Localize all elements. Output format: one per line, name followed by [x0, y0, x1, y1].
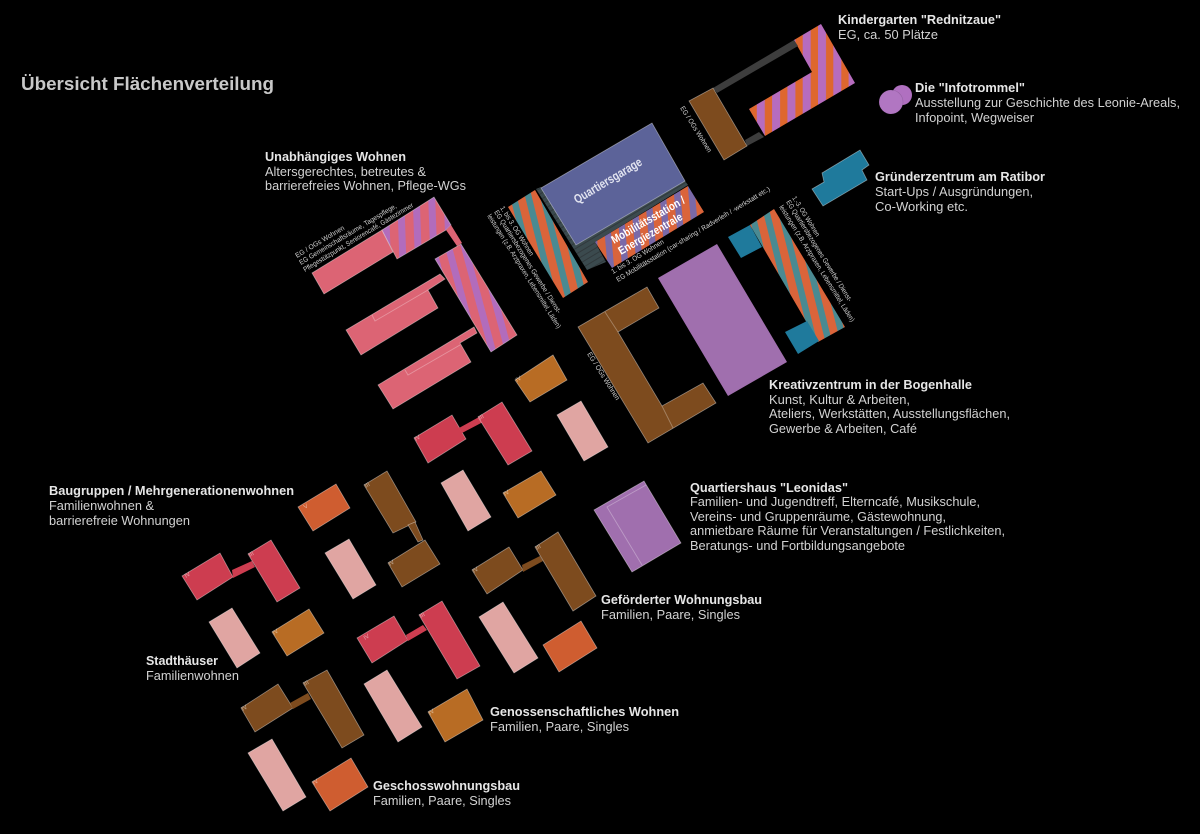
- panel: Unabhängiges Wohnen buildings: [294, 197, 517, 409]
- text: Gründerzentrum: [875, 170, 1045, 214]
- text: Geschosswohnungsbau: Geschosswohnungsbau: [373, 779, 520, 793]
- block row 2: [298, 470, 556, 599]
- text: Unabhängiges Wohnen: Unabhängiges Wohnen: [265, 150, 406, 164]
- dark strip top: [713, 40, 798, 93]
- mobility station block: [595, 186, 704, 268]
- numerals: III: [364, 482, 372, 490]
- mobility rotated labels: EG Mobilitätsstation (car-sharing / Radverleih / -werkstatt etc.): [615, 186, 772, 284]
- text: Stadthäuser: [146, 654, 239, 683]
- numerals: IV: [184, 572, 192, 580]
- building: Gründerzentrum: [812, 150, 869, 206]
- hatched side wing: [750, 209, 845, 342]
- numerals: IV: [272, 629, 280, 637]
- brown building: [689, 88, 747, 160]
- rotated label brown: EG / OGs Wohnen: [585, 351, 620, 402]
- panel: Quartiersgarage and mobility: [485, 123, 772, 330]
- mobility rotated labels: 1. bis 3. OG Wohnen: [610, 239, 666, 276]
- building: hatched care wing top: [382, 197, 451, 259]
- text: Baugruppen: Familienwohnen &: [49, 499, 155, 513]
- text: Quartiershaus: anmietbare Räume für Veranstaltungen / Festlichkeiten,: [690, 524, 1005, 538]
- mobility label: Energiezentrale: [616, 211, 685, 258]
- rotated labels: EG Gemeinschaftsräume, Tagespflege,: [298, 203, 398, 267]
- block row 1: [414, 355, 608, 465]
- text: Geschosswohnungsbau: [373, 779, 520, 808]
- text: Quartiershaus: Vereins- und Gruppenräume, Gästewohnung,: [690, 510, 946, 524]
- rotated labels hatched: EG Quartiersbezogenes Gewerbe / Dienst-: [784, 199, 853, 304]
- garage block: [541, 123, 685, 245]
- rotated label: EG / OGs Wohnen: [678, 105, 712, 154]
- block row 6: [248, 739, 368, 811]
- numerals: IV: [241, 705, 249, 713]
- text: Baugruppen: [49, 484, 294, 528]
- text: Stadthäuser: Familienwohnen: [146, 669, 239, 683]
- dark access strip: [536, 181, 688, 270]
- building: hatched care wing side: [435, 244, 517, 352]
- numerals: IV: [428, 709, 436, 717]
- inner lines: [605, 312, 673, 428]
- text: Unabhängiges Wohnen: barrierefreies Wohnen, Pflege-WGs: [265, 179, 466, 193]
- numerals: III: [248, 551, 256, 559]
- title: Übersicht Flächenverteilung: [21, 74, 274, 94]
- text: Geförderter Wohnungsbau: [601, 593, 762, 622]
- left hatched rotated labels: leistungen (z.B. Arztpraxen, Lebensmittel, Läden): [485, 213, 562, 330]
- text: Quartiershaus: [690, 481, 1005, 553]
- text: Quartiershaus: Beratungs- und Fortbildungsangebote: [690, 539, 905, 553]
- text: Geförderter Wohnungsbau: Geförderter Wohnungsbau: [601, 593, 762, 607]
- text: Kindergarten: [838, 13, 1001, 42]
- text: Quartiershaus: Familien- und Jugendtreff, Elterncafé, Musikschule,: [690, 495, 980, 509]
- inner line middle: [372, 290, 428, 321]
- hatched kindergarten building: [749, 24, 855, 136]
- panel: residential blocks: [182, 355, 608, 811]
- text: Baugruppen: Baugruppen / Mehrgenerationenwohnen: [49, 484, 294, 498]
- building: Quartiershaus Leonidas: [594, 481, 681, 572]
- numerals: III: [535, 544, 543, 552]
- block row 4: [209, 601, 597, 679]
- numerals: IV: [363, 634, 371, 642]
- text: Stadthäuser: Stadthäuser: [146, 654, 218, 668]
- mobility label: Mobilitätsstation /: [610, 194, 688, 247]
- text: Kindergarten: Kindergarten "Rednitzaue": [838, 13, 1001, 27]
- numerals: III: [478, 414, 486, 422]
- rotated labels hatched: leistungen (z.B. Arztpraxen, Lebensmittel, Läden): [777, 204, 855, 323]
- teal block bottom: [785, 321, 819, 354]
- building: pink wing middle: [346, 274, 445, 355]
- rotated labels: EG / OGs Wohnen: [294, 225, 346, 260]
- text: Kreativzentrum: Ateliers, Werkstätten, Ausstellungsflächen,: [769, 407, 1010, 421]
- inner line lower: [405, 345, 460, 375]
- building: pink wing top: [312, 230, 393, 294]
- block row 5: [241, 670, 483, 748]
- numerals: IV: [515, 376, 523, 384]
- numerals: III: [419, 612, 427, 620]
- text: Unabhängiges Wohnen: Altersgerechtes, betreutes &: [265, 165, 427, 179]
- panel: Kreativzentrum complex: [578, 195, 855, 443]
- text: Kreativzentrum: Kreativzentrum in der Bogenhalle: [769, 378, 972, 392]
- text: Geförderter Wohnungsbau: Familien, Paare, Singles: [601, 608, 740, 622]
- text: Geschosswohnungsbau: Familien, Paare, Singles: [373, 794, 511, 808]
- connector: pink link: [446, 225, 462, 246]
- hatched housing left: [508, 190, 588, 298]
- text: Infotrommel: Infopoint, Wegweiser: [915, 111, 1034, 125]
- numerals: V: [303, 504, 309, 511]
- left hatched rotated labels: EG Quartiersbezogenes Gewerbe / Dienst-: [492, 209, 562, 315]
- text: Gründerzentrum: Gründerzentrum am Ratibor: [875, 170, 1045, 184]
- text: Baugruppen: barrierefreie Wohnungen: [49, 514, 190, 528]
- block row 3: [182, 532, 596, 611]
- text: Infotrommel: [915, 81, 1180, 125]
- numerals: IV: [312, 779, 320, 787]
- teal block top: [728, 225, 762, 258]
- rotated labels hatched: 1.-3. OG Wohnen: [790, 195, 821, 238]
- brown C building: [578, 287, 716, 443]
- numerals: III: [303, 680, 311, 688]
- text: Kreativzentrum: Gewerbe & Arbeiten, Café: [769, 422, 917, 436]
- big purple hall: [658, 244, 787, 396]
- text: Infotrommel: Ausstellung zur Geschichte des Leonie-Areals,: [915, 96, 1180, 110]
- panel: Kindergarten: [678, 24, 855, 160]
- numerals: IV: [388, 560, 396, 568]
- numerals: [184, 376, 543, 787]
- text: Gründerzentrum: Start-Ups / Ausgründungen,: [875, 185, 1033, 199]
- numerals: IV: [472, 567, 480, 575]
- rotated labels: Pflegestützpunkt, Seniorencafé, Gästezimmer: [302, 202, 415, 274]
- numerals: IV: [503, 490, 511, 498]
- text: Genossenschaftliches Wohnen: Familien, Paare, Singles: [490, 720, 629, 734]
- text: Genossenschaftliches Wohnen: Genossenschaftliches Wohnen: [490, 705, 679, 719]
- garage label: Quartiersgarage: [571, 155, 645, 207]
- dark strip bottom: [745, 132, 764, 146]
- text: Kindergarten: EG, ca. 50 Plätze: [838, 28, 938, 42]
- text: Genossenschaftliches Wohnen: [490, 705, 679, 734]
- left hatched rotated labels: 1. bis 3. OG Wohnen: [498, 205, 534, 257]
- building: pink wing lower: [378, 327, 477, 409]
- text: Kreativzentrum: Kunst, Kultur & Arbeiten,: [769, 393, 910, 407]
- text: Unabhängiges Wohnen: [265, 150, 466, 193]
- text: Gründerzentrum: Co-Working etc.: [875, 200, 968, 214]
- icon: Infotrommel drums: [879, 85, 912, 114]
- text: Infotrommel: Die "Infotrommel": [915, 81, 1025, 95]
- text: Quartiershaus: Quartiershaus "Leonidas": [690, 481, 848, 495]
- text: Kreativzentrum: [769, 378, 1010, 436]
- numerals: IV: [414, 435, 422, 443]
